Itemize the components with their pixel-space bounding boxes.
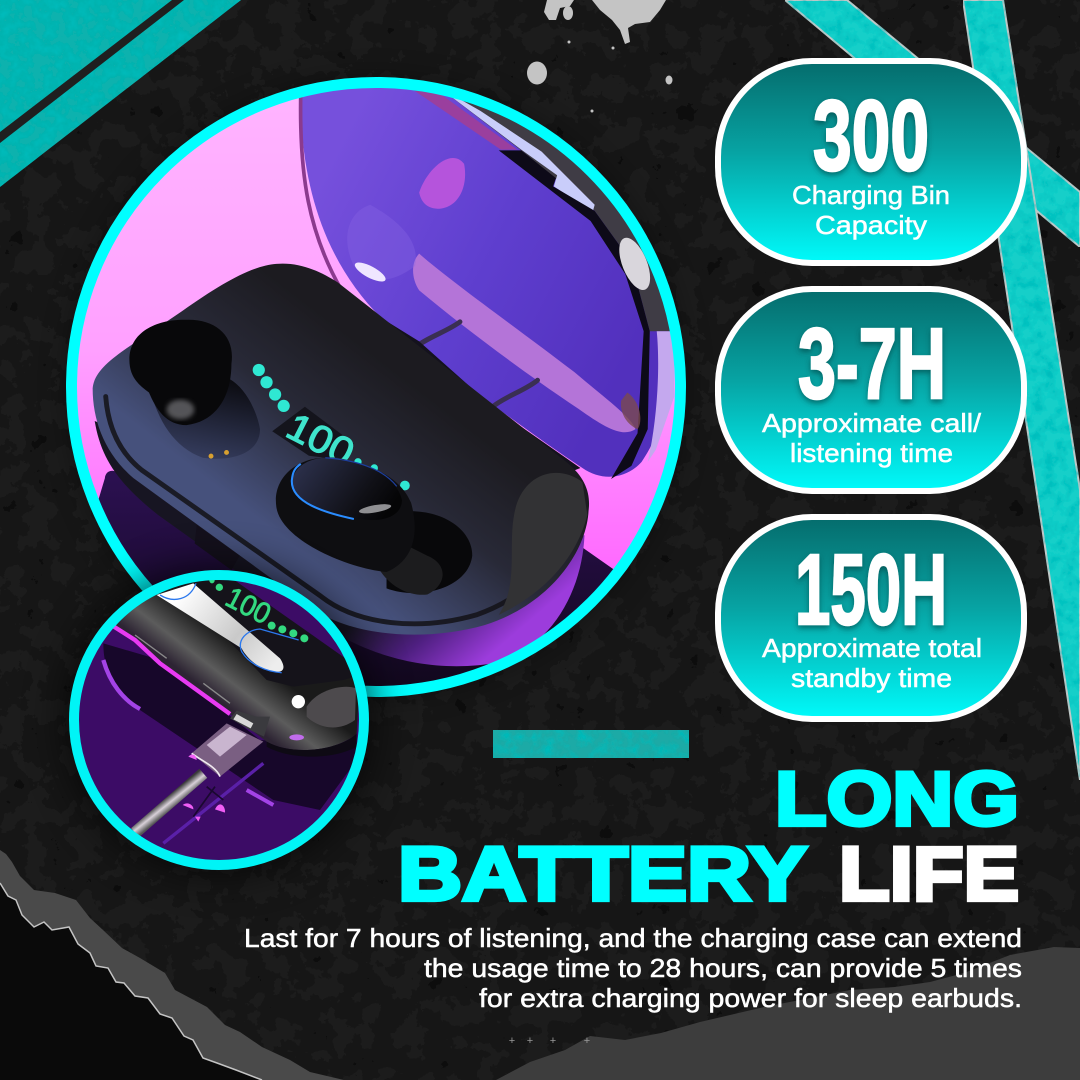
stat value 300: 300 bbox=[813, 80, 929, 192]
case top face bbox=[93, 264, 589, 635]
stat label 150H: Approximate total bbox=[762, 633, 982, 663]
stat label 300: Charging Bin bbox=[792, 180, 950, 210]
white earbud highlight bbox=[157, 583, 299, 673]
decorative plus marks: + bbox=[550, 1035, 556, 1047]
decorative plus marks: + bbox=[584, 1035, 590, 1047]
decorative plus marks: + bbox=[509, 1035, 515, 1047]
case body bbox=[116, 586, 358, 750]
green LED readout bbox=[209, 578, 308, 642]
cable bbox=[135, 773, 203, 833]
lid hinges bbox=[415, 322, 538, 407]
open lid bbox=[298, 88, 674, 479]
main product photo circle bbox=[60, 70, 713, 723]
paint splatter bbox=[527, 0, 672, 112]
stat label 3-7H: Approximate call/ bbox=[762, 408, 982, 438]
right socket and ear tip bbox=[378, 511, 472, 595]
right earbud bbox=[276, 457, 415, 572]
usb-c plug bbox=[188, 711, 270, 777]
headline: LIFE bbox=[839, 832, 1019, 917]
body text: for extra charging power for sleep earbuds. bbox=[479, 983, 1022, 1013]
stat value 150H: 150H bbox=[795, 534, 947, 646]
headline: LONG bbox=[775, 757, 1019, 842]
battery LED dots bbox=[253, 364, 410, 490]
stat label 3-7H: listening time bbox=[790, 438, 953, 468]
teal stripes top right bbox=[785, 0, 1080, 780]
teal accent bar bbox=[493, 730, 689, 758]
pink backdrop bbox=[77, 98, 675, 569]
inset circle: charging cable bbox=[60, 560, 380, 880]
stat value 3-7H: 3-7H bbox=[798, 308, 946, 420]
body text: Last for 7 hours of listening, and the charging case can extend bbox=[244, 923, 1022, 953]
cable reflection bbox=[163, 763, 263, 843]
headline bbox=[398, 757, 1019, 917]
case base bbox=[95, 421, 584, 666]
stat label 300: Capacity bbox=[815, 210, 927, 240]
body text bbox=[244, 923, 1022, 1013]
magenta edge light bbox=[114, 627, 230, 714]
stat pill: 300 bbox=[718, 61, 1024, 263]
case reflection bbox=[98, 470, 614, 686]
hinge shadow bbox=[388, 322, 580, 470]
torn dark corner bbox=[0, 850, 344, 1080]
stat pill: 3-7H bbox=[718, 289, 1024, 491]
left earbud socket bbox=[129, 320, 260, 459]
body text: the usage time to 28 hours, can provide 5 times bbox=[424, 953, 1022, 983]
green LED readout: 100 bbox=[220, 581, 276, 631]
stat label 3-7H bbox=[762, 408, 982, 468]
stat label 150H bbox=[762, 633, 982, 693]
LED display: 100 bbox=[280, 405, 361, 475]
usb side port bbox=[194, 542, 232, 570]
stat label 150H: standby time bbox=[791, 663, 952, 693]
stat label 300 bbox=[792, 180, 950, 240]
torn grey paper bottom right bbox=[496, 947, 1080, 1080]
teal corner top left bbox=[0, 0, 241, 187]
purple surface bbox=[60, 560, 380, 880]
decorative plus marks: + bbox=[527, 1035, 533, 1047]
stat pill: 150H bbox=[718, 517, 1024, 719]
decorative plus marks bbox=[509, 1035, 590, 1047]
case reflection bbox=[103, 643, 367, 810]
headline: BATTERY bbox=[398, 832, 807, 917]
